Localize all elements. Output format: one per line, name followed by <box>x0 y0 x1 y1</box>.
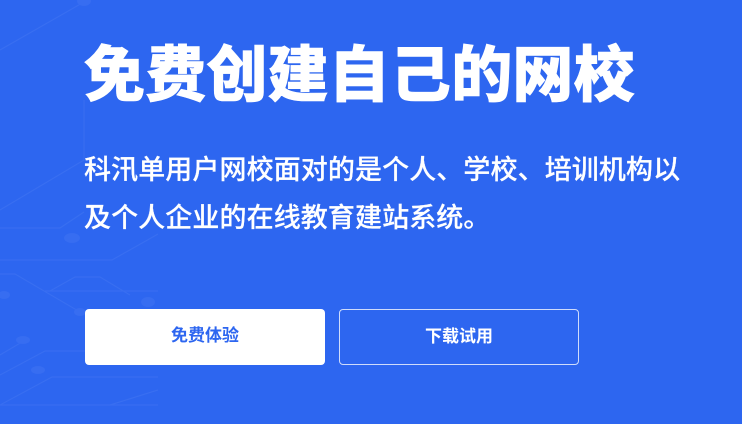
title: 免费创建自己的网校 <box>84 41 635 109</box>
description text: 科汛单用户网校面对的是个人、学校、培训机构以 <box>84 155 680 185</box>
button: download: 下载试用 <box>425 327 493 346</box>
button: free trial <box>85 309 325 365</box>
description text: 及个人企业的在线教育建站系统。 <box>84 203 490 233</box>
description text <box>84 155 680 233</box>
button: download <box>339 309 579 365</box>
button: free trial: 免费体验 <box>171 326 239 345</box>
